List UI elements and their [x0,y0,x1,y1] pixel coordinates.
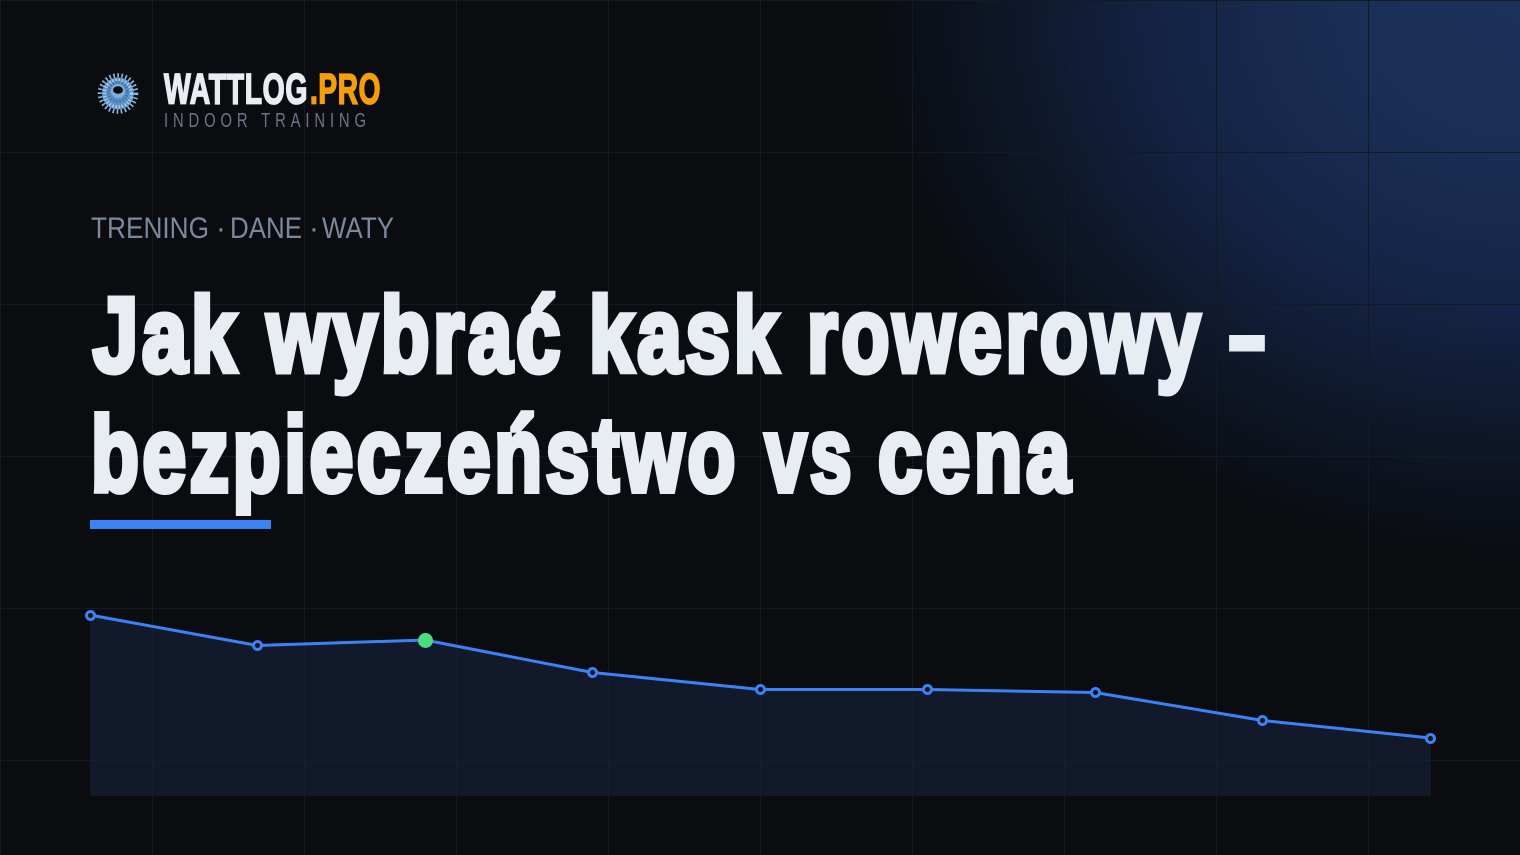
eyebrow text: · [216,212,226,245]
logo tagline: INDOOR TRAINING [164,109,366,132]
eyebrow text: WATY [322,212,394,245]
eyebrow text: DANE [230,212,302,245]
title: wybrać [266,276,564,394]
title: bezpieczeństwo [91,396,739,514]
logo wordmark: WATTLOG [164,66,308,114]
chart line [90,615,1430,738]
line chart [86,612,1434,796]
title: cena [878,396,1074,514]
title: Jak [93,276,240,394]
title: kask [589,276,782,394]
chart data points [86,612,1434,742]
icon: cassette logo [100,76,136,112]
title: vs [765,396,855,514]
logo wordmark: .PRO [310,66,381,114]
title [91,276,1268,514]
eyebrow text [91,212,394,245]
eyebrow text: · [309,212,319,245]
eyebrow text: TRENING [91,212,209,245]
title: – [1229,276,1268,394]
chart area fill [90,615,1431,796]
title: rowerowy [807,276,1204,394]
highlighted data point [418,633,433,648]
title underline accent [90,520,271,529]
